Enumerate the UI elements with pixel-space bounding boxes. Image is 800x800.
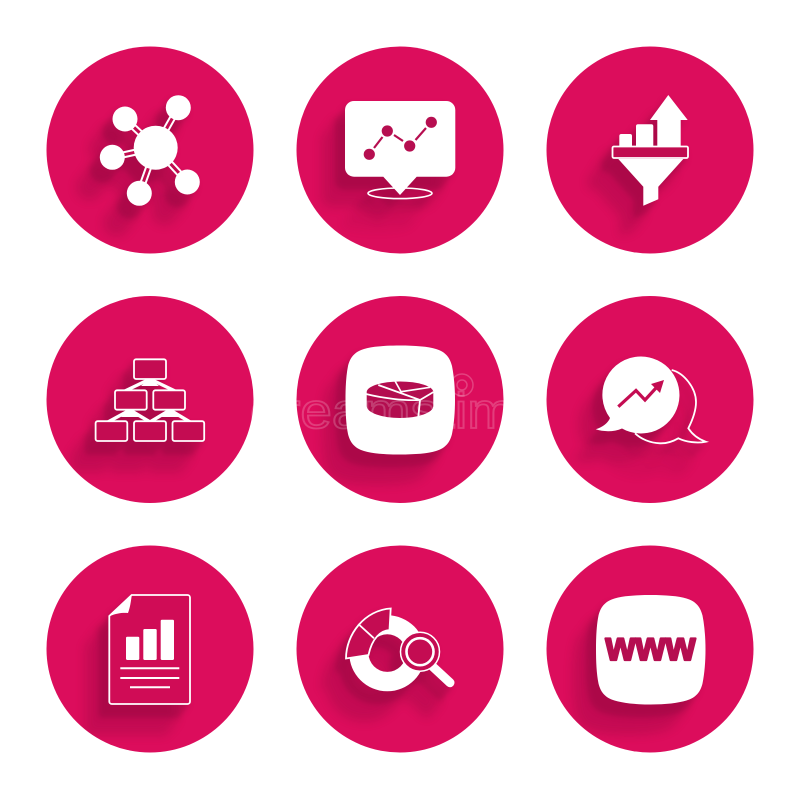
icon: speech bubbles with trend arrow (596, 356, 706, 443)
text: www: www (605, 623, 696, 669)
icon: speech pin with line chart (345, 101, 455, 199)
panel: hierarchy (46, 296, 254, 503)
icon: donut chart with magnifier (346, 608, 450, 691)
icon: document with bar chart (109, 595, 190, 704)
icon: squircle with pie chart (346, 346, 455, 454)
panel: report document (46, 546, 254, 752)
icon: hierarchy blocks (96, 359, 204, 441)
panel: chat growth (546, 296, 754, 503)
panel: chart location pin (296, 46, 504, 254)
icon: squircle with www (596, 595, 706, 704)
icon: funnel with growth bars (612, 95, 688, 206)
panel: sales funnel (546, 46, 754, 254)
icon grid (46, 46, 754, 752)
watermark: dreamstime (250, 383, 546, 439)
panel: chart analysis (296, 546, 504, 752)
panel: website (546, 546, 754, 752)
panel: network nodes (46, 46, 254, 254)
panel: pie chart (296, 296, 504, 503)
icon: network hub (100, 95, 200, 206)
